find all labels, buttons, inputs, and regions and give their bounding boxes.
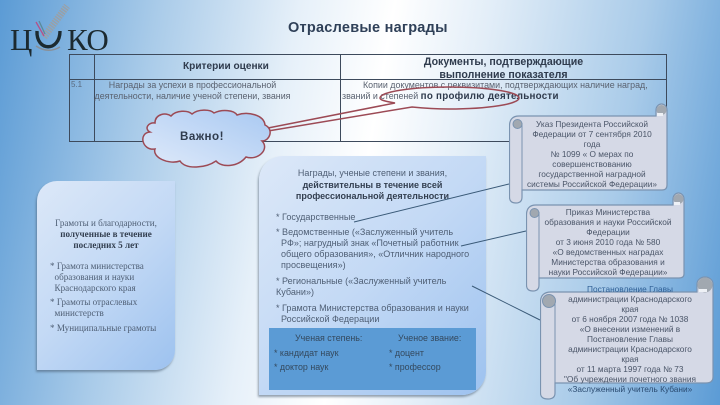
box: degrees and titles [269,328,476,390]
scroll: regional decree [540,276,714,400]
panel heading [296,168,449,201]
row number: 5.1 [71,80,82,89]
scroll: ministry order [526,192,685,292]
degree column [274,333,362,372]
row criteria text: Награды за успехи в профессиональной [109,80,276,90]
cloud: Важно! [142,109,271,168]
panel heading: Грамоты и благодарности, [55,218,157,228]
scroll: presidential decree [509,103,668,204]
table header: documents: выполнение показателя [439,68,568,80]
scroll text: от 3 июня 2010 года № 580 [556,237,660,247]
row documents text: Копии документов с реквизитами, подтверждающих наличие наград, [363,80,648,90]
scroll text [564,284,696,394]
row documents text [342,80,648,102]
scroll text: образования и науки Российской [544,217,672,227]
scroll text: государственной наградной [538,169,646,179]
title column: Ученое звание: [398,333,461,343]
scroll text: администрации Краснодарского [568,344,692,354]
row documents text: званий и степеней по профилю деятельности [342,91,559,102]
panel: awards and degrees [259,156,486,395]
degree column: * кандидат наук [274,348,338,358]
logo: ЦОКО [10,4,108,57]
table header: documents: Документы, подтверждающие [424,56,583,68]
logo letters Ц: Ц [10,22,32,57]
panel heading: последних 5 лет [73,240,139,250]
logo letters КО: КО [67,22,108,57]
scroll text: Постановление Главы [587,334,673,344]
scroll text: «О ведомственных наградах [553,247,663,257]
scroll text: «Заслуженный учитель Кубани» [568,384,692,394]
scroll text: Указ Президента Российской [536,119,648,129]
scroll text: Министерства образования и [551,257,665,267]
panel: certificates [37,181,175,370]
scroll text: системы Российской Федерации» [527,179,657,189]
panel list: Российской Федерации [281,314,379,324]
arrows: connector lines [354,184,540,320]
title column [389,333,461,372]
scroll text: Федерации [586,227,630,237]
cloud label: Важно! [180,130,224,143]
table: criteria and documents [69,54,667,142]
panel list: Кубани») * Грамота Министерства образования и науки [276,287,469,313]
scroll text: года [584,139,600,149]
scroll text: администрации Краснодарского [568,294,692,304]
row criteria text [94,80,290,101]
scroll text: совершенствованию [552,159,632,169]
panel list: * Грамота министерства [50,261,144,271]
scroll text: от 11 марта 1997 года № 73 [576,364,684,374]
scroll text: от 6 ноября 2007 года № 1038 [572,314,688,324]
panel heading: Награды, ученые степени и звания, [298,168,447,178]
scroll text: края [621,304,639,314]
scroll text [527,119,657,189]
scroll text: "Об учреждении почетного звания [564,374,696,384]
panel list: РФ»; нагрудный знак «Почетный работник [281,238,459,248]
panel heading [55,218,157,250]
title column: * доцент [389,348,424,358]
panel list: * Государственные * Ведомственные («Заслуженный учитель [276,212,453,237]
scroll text: науки Российской Федерации» [549,267,667,277]
panel heading: полученные в течение [60,229,152,239]
logo icon [35,4,70,51]
title: Отраслевые награды [288,20,448,36]
scroll text: № 1099 « О мерах по [551,149,633,159]
table header: documents [424,56,583,80]
panel heading: действительны в течение всей [303,180,442,190]
scroll text [544,207,672,277]
scroll text: Постановление Главы [587,284,673,294]
panel heading: профессиональной деятельности [296,191,449,201]
panel list: просвещения») * Региональные («Заслуженный учитель [276,260,446,286]
degree column: Ученая степень: [295,333,362,343]
table header: criteria: Критерии оценки [183,61,269,72]
panel list: министерств * Муниципальные грамоты [50,308,156,333]
degree column: * доктор наук [274,362,328,372]
title column: * профессор [389,362,441,372]
panel list [276,212,469,324]
panel list: образования и науки [55,272,134,282]
scroll text: Приказ Министерства [566,207,650,217]
scroll text: края [621,354,639,364]
panel list [50,261,156,333]
panel list: Краснодарского края * Грамоты отраслевых [50,283,137,307]
row criteria text: деятельности, наличие ученой степени, звания [95,91,290,101]
scroll text: Федерации от 7 сентября 2010 [532,129,652,139]
panel list: общего образования», «Отличник народного [281,249,469,259]
scroll text: «О внесении изменений в [580,324,680,334]
